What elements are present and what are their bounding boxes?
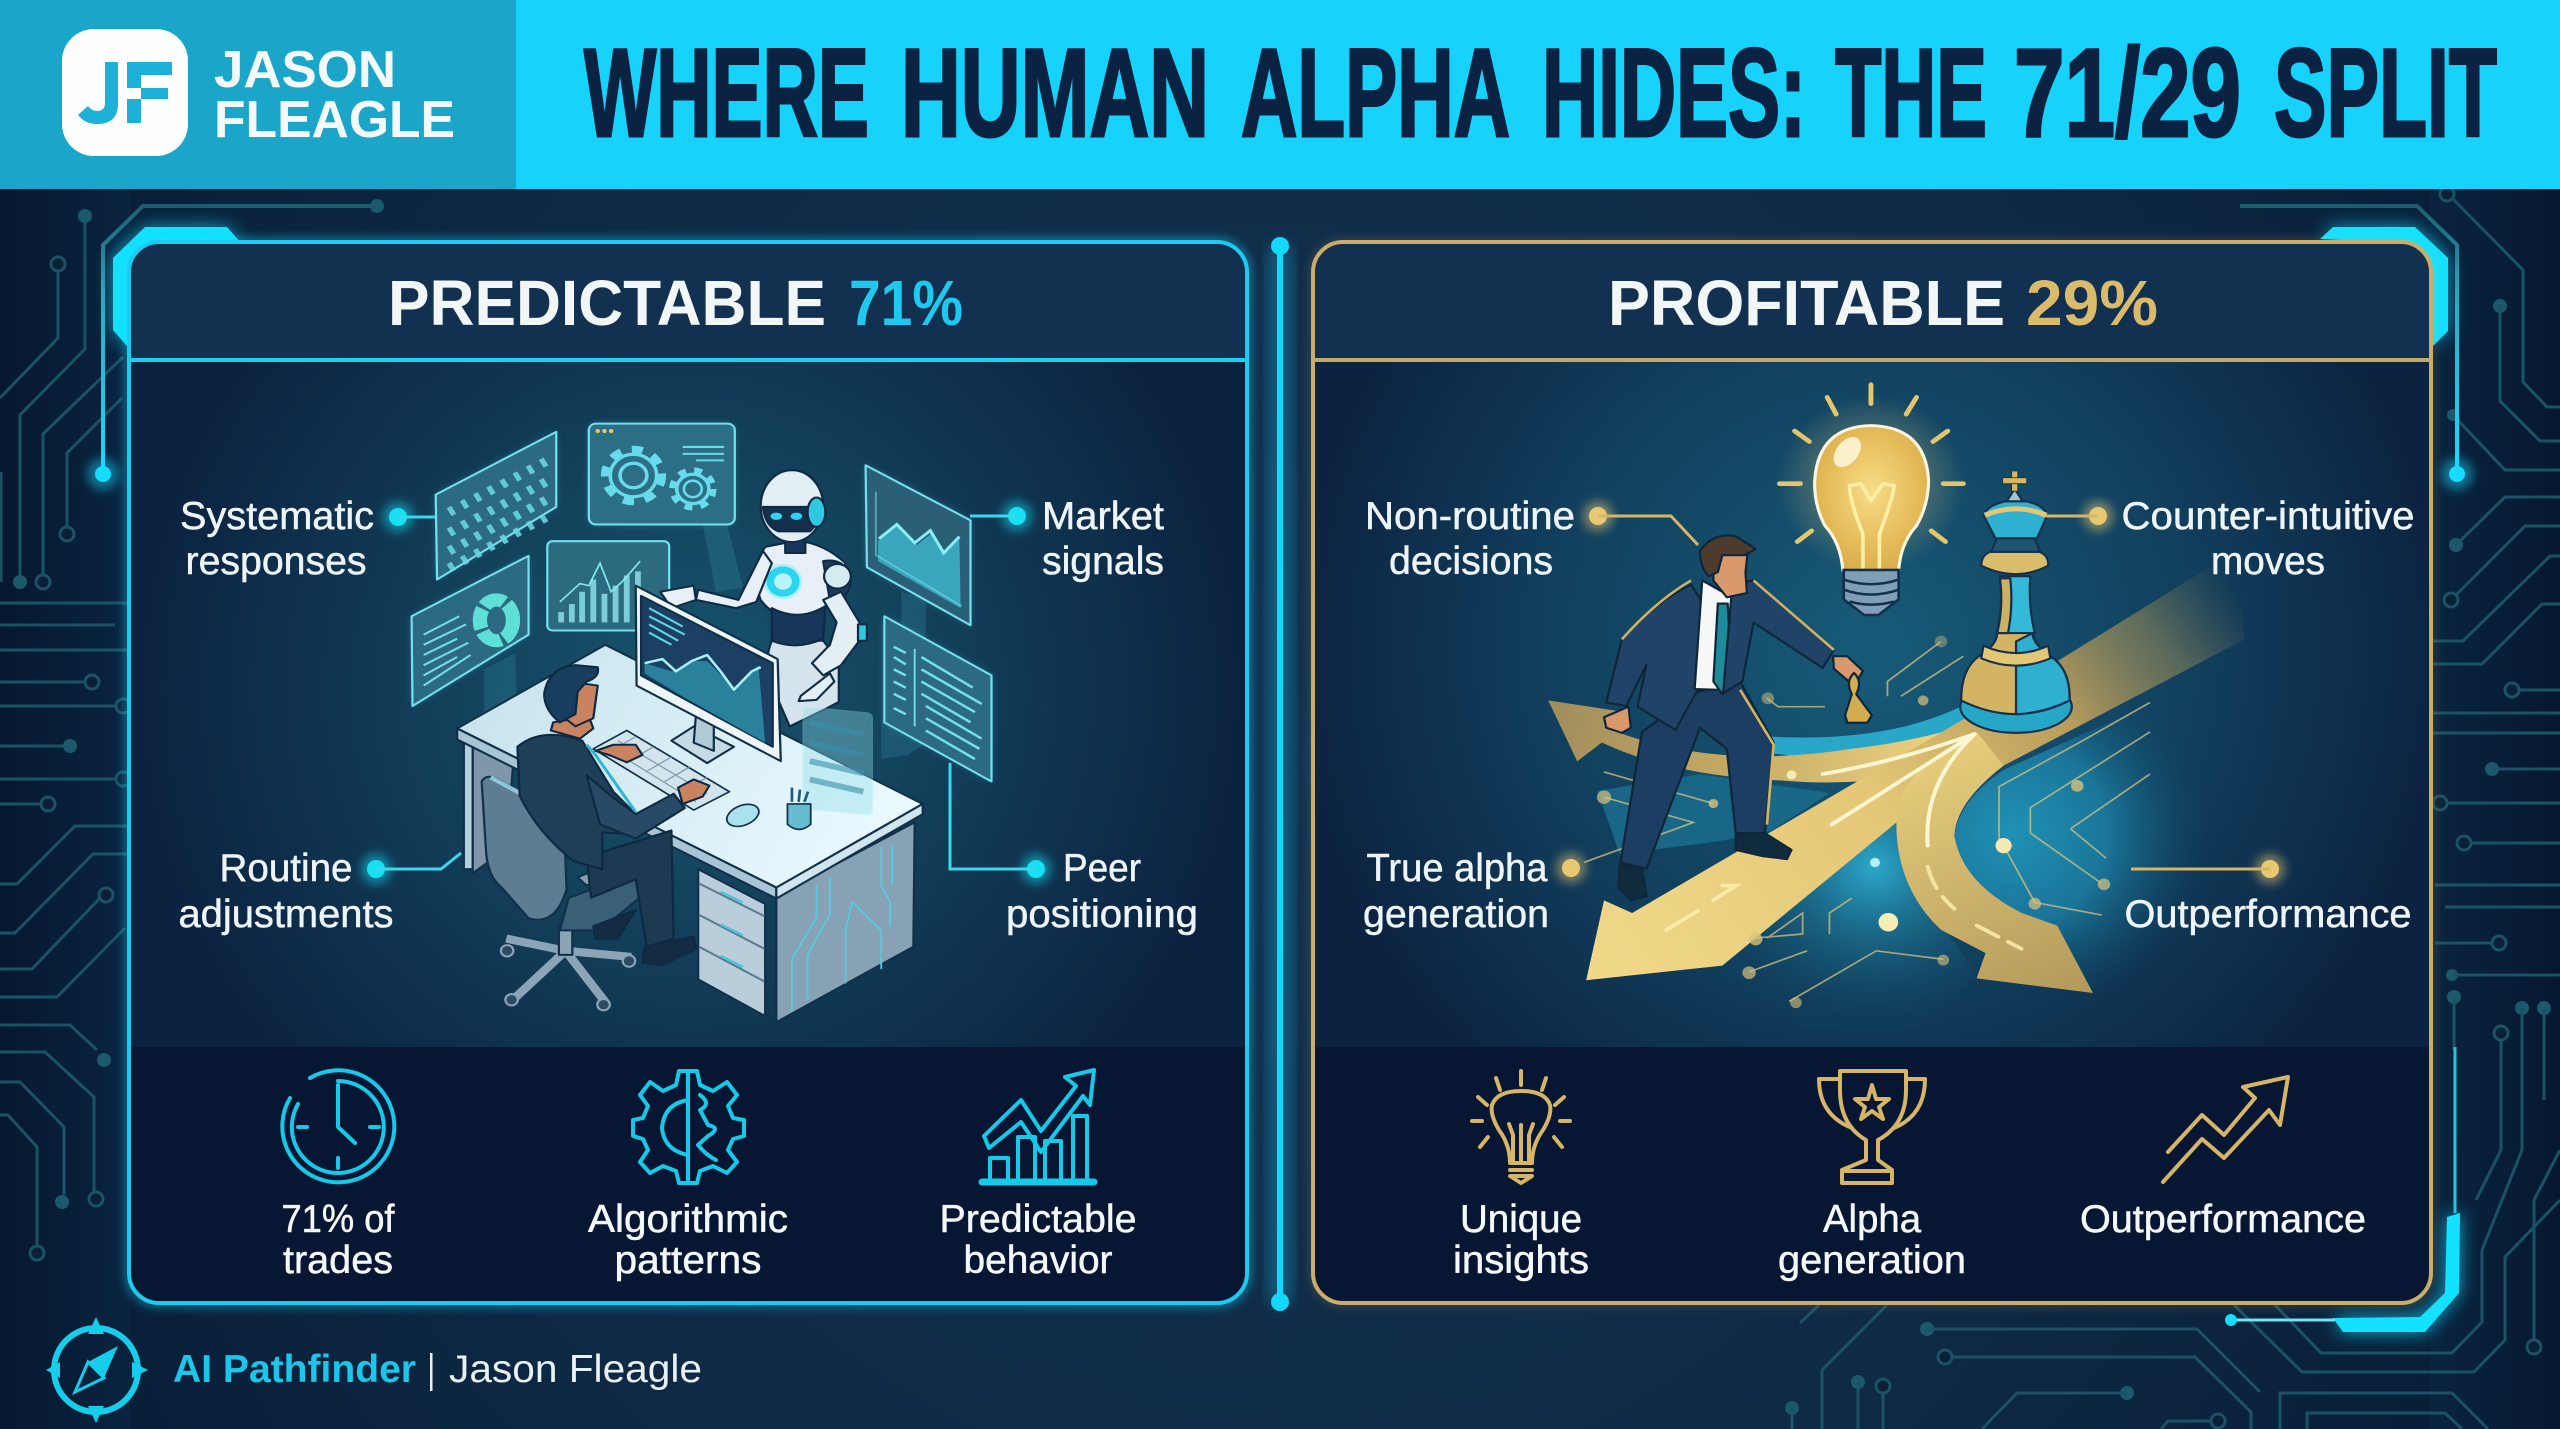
- callout: systematic responses: [180, 495, 435, 583]
- callout: peer positioning: Peer: [1063, 847, 1141, 890]
- logo wordmark: JASON: [214, 41, 396, 99]
- keyboard, mouse, pen cup: [593, 730, 811, 831]
- title: [584, 24, 2497, 163]
- callout: routine adjustments: Routine: [220, 847, 352, 890]
- callout: market signals: Market: [1042, 495, 1164, 538]
- office chair: [482, 777, 645, 1010]
- stat: 71% of trades: [282, 1198, 395, 1282]
- screen: gears: [589, 424, 735, 524]
- callout: true alpha generation: generation: [1363, 893, 1549, 936]
- stat: alpha generation: Alpha: [1823, 1198, 1921, 1241]
- callout: peer positioning: [950, 763, 1198, 936]
- icon: light bulb: [1472, 1071, 1570, 1183]
- executive: [1604, 535, 1872, 900]
- logo wordmark: [214, 41, 455, 149]
- circuit traces: right: [2234, 187, 2560, 1372]
- bulb: [1777, 385, 1965, 615]
- icon: rising bar chart: [982, 1070, 1094, 1182]
- stat: alpha generation: generation: [1778, 1239, 1966, 1282]
- holographic beams: [484, 524, 926, 759]
- title: THE: [1835, 24, 1987, 163]
- callout: systematic responses: responses: [186, 540, 366, 583]
- screen: binary: [436, 432, 556, 580]
- callout: routine adjustments: adjustments: [178, 893, 394, 936]
- screen: market chart: [866, 465, 970, 625]
- footer text: Jason Fleagle: [449, 1348, 702, 1391]
- header band: [0, 0, 2560, 189]
- panel: predictable 71%: [129, 242, 1247, 1303]
- heading: profitable 29%: PROFITABLE: [1608, 267, 2005, 339]
- circuit traces: left: [0, 209, 130, 1260]
- chess king: [1960, 471, 2072, 733]
- callout: outperformance: Outperformance: [2124, 893, 2412, 936]
- icon: clock: [282, 1070, 394, 1182]
- icon: rising zigzag arrow: [2163, 1077, 2288, 1182]
- footer text: AI Pathfinder: [173, 1348, 416, 1391]
- stat: alpha generation: [1778, 1198, 1966, 1282]
- callout: non-routine decisions: Non-routine: [1365, 495, 1575, 538]
- title: HUMAN: [901, 24, 1209, 163]
- illustration: executive, chess king and light bulb on diverging paths: [1548, 385, 2245, 1030]
- heading: predictable 71%: 71%: [849, 267, 963, 339]
- path highlights: [1667, 734, 2021, 949]
- stat: outperformance: Outperformance: [2080, 1198, 2366, 1241]
- logo wordmark: FLEAGLE: [214, 91, 455, 149]
- corner accents: [113, 227, 2460, 1332]
- circuit traces: bottom right: [1785, 1305, 2488, 1429]
- analyst at desk: [517, 665, 709, 965]
- robot: [660, 470, 867, 726]
- stat: 71% of trades: 71% of: [282, 1198, 395, 1241]
- callout: true alpha generation: [1363, 847, 1586, 936]
- callout: market signals: [970, 495, 1164, 583]
- panel: profitable 29%: [1313, 242, 2431, 1303]
- stat: unique insights: insights: [1453, 1239, 1589, 1282]
- desk: [457, 645, 923, 1022]
- callout: non-routine decisions: decisions: [1389, 540, 1553, 583]
- stat: algorithmic patterns: patterns: [614, 1239, 762, 1282]
- icon: trophy: [1819, 1071, 1925, 1183]
- title: 71/29: [2014, 24, 2241, 163]
- callout: market signals: signals: [1042, 540, 1164, 583]
- callout: non-routine decisions: [1365, 495, 1698, 583]
- holographic note: [803, 707, 872, 815]
- callout: outperformance: [2124, 854, 2412, 936]
- gold path arrows: [1548, 551, 2245, 993]
- center divider: [1270, 237, 1290, 1311]
- heading: profitable 29%: 29%: [2026, 267, 2158, 339]
- screen: bar chart: [547, 541, 669, 631]
- stat: unique insights: Unique: [1460, 1198, 1582, 1241]
- stat: 71% of trades: trades: [283, 1239, 393, 1282]
- screen: code: [884, 616, 991, 781]
- callout: counter-intuitive moves: moves: [2211, 540, 2325, 583]
- stat: algorithmic patterns: [588, 1198, 788, 1282]
- icon: compass: [46, 1317, 148, 1423]
- callout: counter-intuitive moves: Counter-intuitive: [2122, 495, 2414, 538]
- callout: systematic responses: Systematic: [180, 495, 374, 538]
- screen: donut: [412, 556, 529, 706]
- callout: counter-intuitive moves: [2046, 495, 2414, 583]
- title: ALPHA: [1241, 24, 1510, 163]
- monitor: [636, 586, 781, 763]
- callout: peer positioning: positioning: [1006, 893, 1198, 936]
- stat: predictable behavior: [940, 1198, 1136, 1282]
- teal ground shapes: [1597, 677, 2209, 1030]
- heading: predictable 71%: PREDICTABLE: [388, 267, 826, 339]
- title: HIDES:: [1542, 24, 1806, 163]
- title: WHERE: [584, 24, 869, 163]
- callout: routine adjustments: [178, 847, 461, 936]
- connector lines with dots around panels: [87, 199, 2473, 1326]
- callout: true alpha generation: True alpha: [1366, 847, 1548, 890]
- illustration: analyst, robot and holographic screens: [412, 424, 991, 1022]
- footer brand: [46, 1317, 702, 1423]
- stat: predictable behavior: Predictable: [940, 1198, 1136, 1241]
- stat: predictable behavior: behavior: [964, 1239, 1113, 1282]
- stat: algorithmic patterns: Algorithmic: [588, 1198, 788, 1241]
- stat: unique insights: [1453, 1198, 1589, 1282]
- logo mark: [62, 29, 188, 156]
- icon: algorithmic gear: [633, 1071, 744, 1183]
- footer text: [173, 1348, 702, 1391]
- circuit lines on the ground: [1584, 641, 2150, 1001]
